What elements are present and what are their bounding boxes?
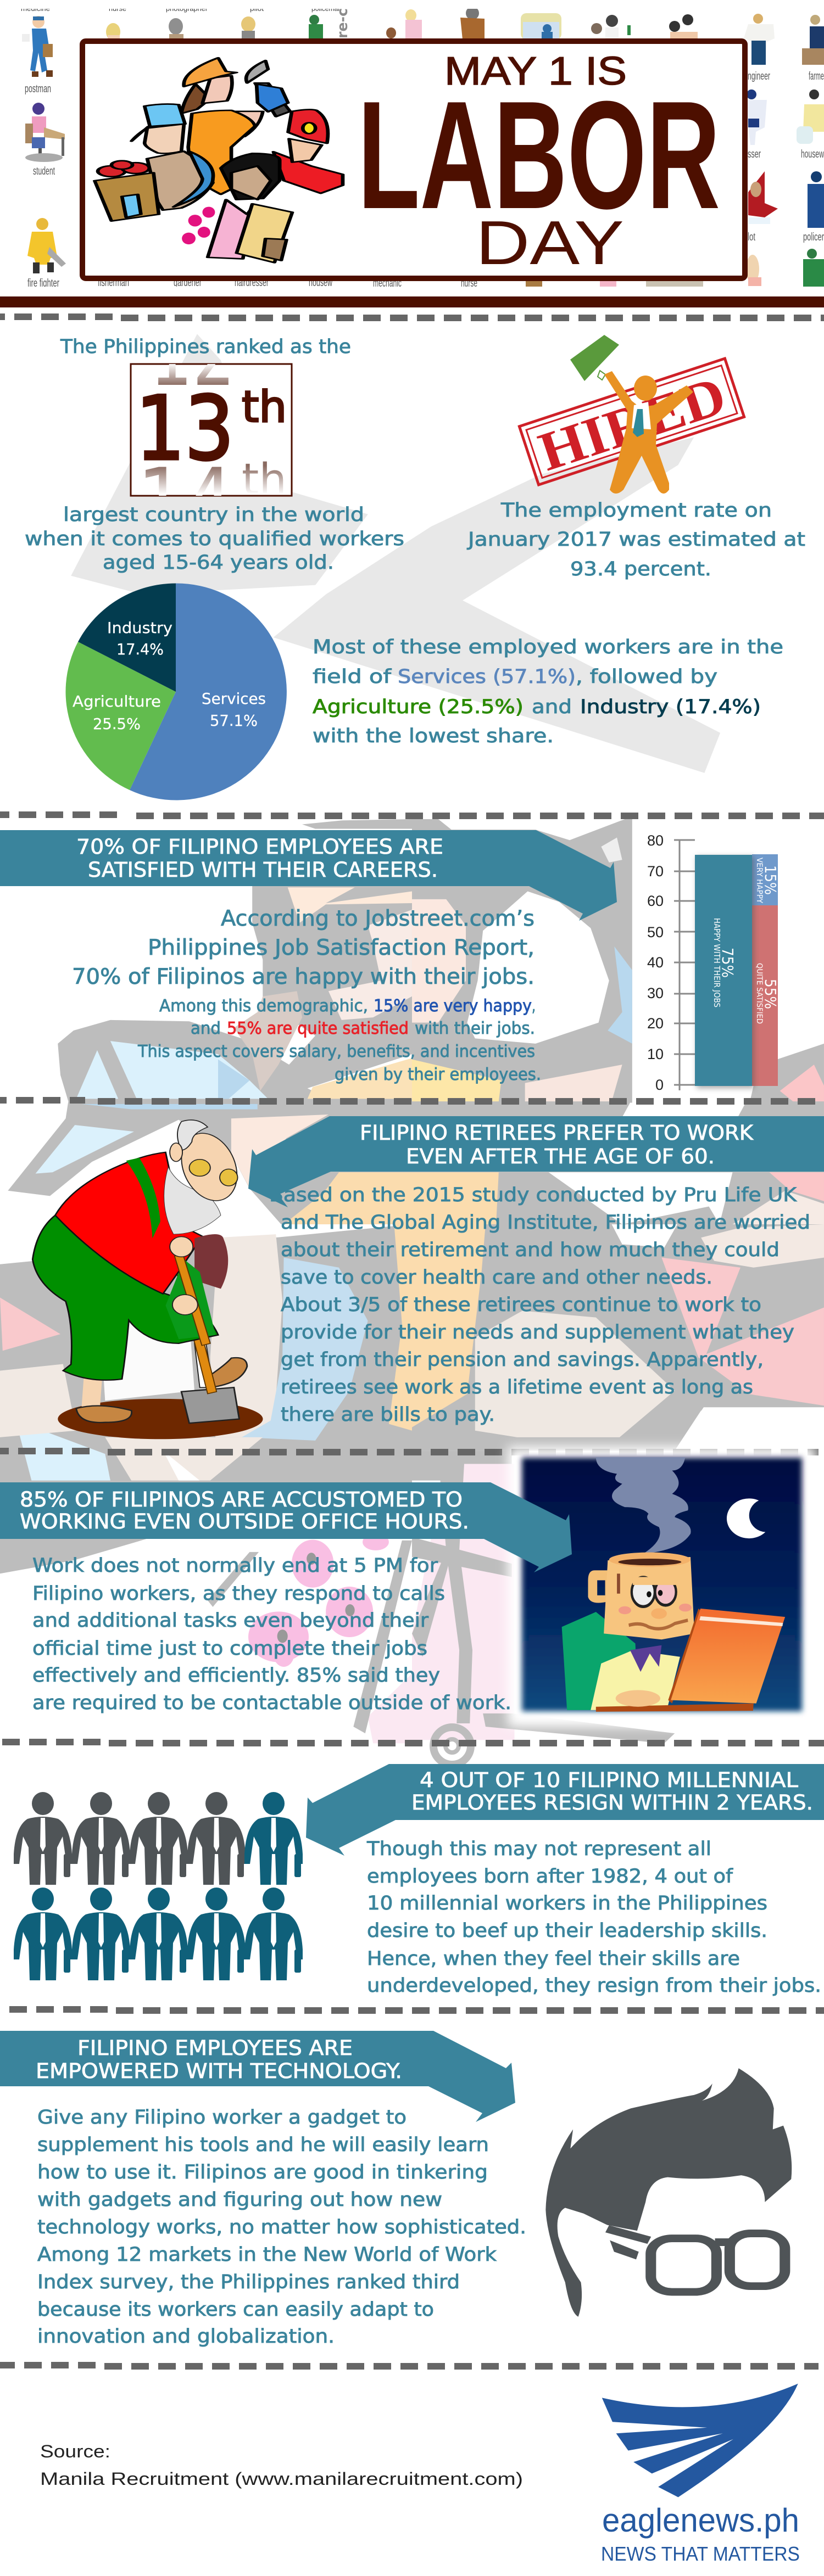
upper left watermark	[8, 819, 412, 1224]
glasses	[190, 1160, 238, 1186]
text: job satisfaction report: and	[191, 1019, 221, 1038]
bar: happy with their jobs	[695, 855, 752, 1086]
text: outside office paragraph: effectively and efficiently. 85% said they	[32, 1665, 440, 1687]
text: sector summary: with the lowest share.	[313, 725, 554, 747]
side and bottom labels: nurse	[461, 277, 477, 289]
text: job satisfaction report: ,	[532, 996, 536, 1016]
text: sector summary: Most of these employed workers are in the	[313, 636, 783, 658]
section: technology	[0, 2031, 792, 2348]
hired stamp: HIRED	[532, 365, 733, 483]
clipboard woman	[208, 153, 292, 262]
slice: services	[130, 583, 287, 800]
side and bottom labels: fisherman	[98, 277, 129, 289]
text: sector summary: field of	[313, 666, 392, 688]
title text: May 1 is Labor Day: MAY 1 IS	[444, 49, 627, 93]
illustration: four workers	[94, 58, 343, 262]
text: job satisfaction report: This aspect covers salary, benefits, and incentives	[137, 1042, 535, 1061]
text: outside office paragraph: official time just to complete their jobs	[32, 1638, 427, 1660]
text: largest country: when it comes to qualified workers	[25, 528, 404, 550]
text: retirees paragraph: Based on the 2015 study conducted by Pru Life UK	[269, 1184, 797, 1206]
side and bottom labels: sser	[748, 148, 761, 160]
section: retirees	[32, 1116, 824, 1439]
side and bottom labels: housew	[309, 277, 332, 289]
banner arrow: technology: FILIPINO EMPLOYEES ARE	[77, 2036, 353, 2060]
section: outside office hours	[0, 1447, 816, 1727]
top row occupation labels: pilot	[250, 4, 264, 13]
rank counter box: 14	[137, 449, 233, 552]
bar value labels: 15%	[761, 865, 780, 895]
dashed divider	[0, 2365, 819, 2366]
text: outside office paragraph: are required to be contactable outside of work.	[32, 1692, 511, 1714]
top row occupation labels	[21, 9, 342, 12]
text: job satisfaction report: 55% are quite satisfied	[227, 1019, 409, 1038]
source note: Source:	[40, 2441, 110, 2461]
text: largest country: aged 15-64 years old.	[103, 552, 334, 574]
dashed divider	[0, 1100, 819, 1101]
rank counter box: 13	[136, 377, 234, 480]
figure: student	[25, 103, 65, 162]
top row occupation labels: policeman	[311, 4, 342, 13]
section: millennials	[14, 1764, 824, 1997]
text: job satisfaction report: 15% are very happy	[374, 996, 532, 1016]
icon: man with glasses	[545, 2068, 792, 2317]
text: retirees paragraph: save to cover health care and other needs.	[281, 1267, 712, 1289]
eyes	[632, 1577, 676, 1606]
top row figures	[106, 9, 698, 38]
hair	[177, 1120, 208, 1150]
legs and boots	[76, 1343, 247, 1423]
text: technology paragraph: with gadgets and figuring out how new	[37, 2189, 442, 2211]
text: largest country	[25, 504, 404, 574]
collar	[630, 1645, 661, 1672]
axis labels: 60	[647, 893, 664, 909]
text: millennials paragraph: desire to beef up their leadership skills.	[367, 1920, 767, 1942]
text: employment rate: January 2017 was estimated at	[467, 529, 805, 551]
text: job satisfaction report: given by their employees.	[335, 1065, 541, 1084]
background: giant workers watermark	[0, 819, 824, 1765]
text: millennials paragraph: Though this may not represent all	[366, 1838, 711, 1860]
section: hired figure and employment rate	[467, 335, 805, 580]
laptop	[668, 1609, 703, 1704]
text: retirees paragraph: About 3/5 of these retirees continue to work to	[281, 1294, 761, 1316]
title text: May 1 is Labor Day: DAY	[476, 208, 624, 277]
top row occupation labels: nurse	[109, 4, 126, 13]
face	[172, 1128, 246, 1206]
text: retirees paragraph: there are bills to pay.	[281, 1404, 495, 1426]
axis labels: 80	[647, 832, 664, 849]
ground	[58, 1399, 263, 1439]
text: technology paragraph: Among 12 markets in the New World of Work	[37, 2244, 497, 2266]
bar value labels: 75%	[719, 948, 737, 978]
dashed divider	[0, 815, 824, 816]
banner arrow: satisfied with careers	[0, 830, 617, 921]
header rule	[0, 296, 824, 307]
side and bottom labels: mechanic	[373, 277, 402, 289]
text: job satisfaction report: with their jobs.	[415, 1019, 535, 1038]
text: millennials paragraph: Hence, when they feel their skills are	[367, 1948, 740, 1970]
background: crossed tools watermark	[71, 334, 720, 773]
text: employment rate: 93.4 percent.	[570, 558, 711, 580]
axis labels: 20	[647, 1015, 664, 1032]
banner arrow: millennials	[306, 1764, 824, 1856]
top row occupation labels: photographer	[166, 4, 208, 13]
bar shadow	[697, 856, 754, 1088]
text: technology paragraph: Index survey, the Philippines ranked third	[37, 2271, 460, 2293]
upper right watermark	[412, 819, 824, 1224]
axis labels: 40	[647, 954, 664, 971]
text: technology paragraph: technology works, no matter how sophisticated.	[37, 2216, 526, 2238]
glow	[508, 1447, 816, 1727]
bar value labels: 55%	[761, 979, 780, 1009]
slice: industry	[78, 583, 176, 692]
text: ranked as the: The Philippines ranked as the	[60, 336, 351, 358]
bar value labels: QUITE SATISFIED	[755, 963, 764, 1024]
header job clip-art strip	[21, 4, 824, 289]
suspender	[126, 1158, 160, 1239]
pie labels	[73, 619, 266, 733]
banner arrow: millennials: 4 OUT OF 10 FILIPINO MILLENNIAL	[420, 1768, 798, 1792]
lower right watermark	[412, 1224, 824, 1743]
text: retirees paragraph	[269, 1184, 810, 1426]
hair	[545, 2068, 792, 2317]
side and bottom labels: ngineer	[748, 70, 770, 82]
bar value labels: HAPPY WITH THEIR JOBS	[712, 918, 722, 1007]
text: retirees paragraph: get from their pension and savings. Apparently,	[281, 1349, 764, 1371]
chart axis	[674, 840, 695, 1090]
side and bottom labels: fire fighter	[27, 277, 59, 289]
text: retirees paragraph: about their retirement and how much they could	[281, 1239, 780, 1261]
banner arrow: satisfied with careers: 70% OF FILIPINO EMPLOYEES ARE	[76, 835, 443, 859]
shirt	[591, 1650, 680, 1710]
text: sector summary: Services (57.1%)	[398, 666, 576, 688]
rank counter box: th	[242, 383, 287, 432]
section: career satisfaction	[0, 819, 824, 1103]
axis labels: 30	[647, 985, 664, 1001]
beard	[164, 1167, 221, 1234]
pie labels: 57.1%	[210, 712, 258, 730]
banner arrow: retirees: EVEN AFTER THE AGE OF 60.	[406, 1145, 715, 1168]
logo: eaglenews.ph	[601, 2384, 800, 2565]
pie labels: Agriculture	[73, 692, 161, 710]
text: retirees paragraph: and The Global Aging Institute, Filipinos are worried	[281, 1212, 810, 1234]
pie labels: Industry	[107, 619, 172, 637]
stethoscope ring	[433, 1727, 471, 1765]
dashed divider	[0, 1451, 819, 1452]
text: employment rate	[467, 500, 805, 580]
flowers	[182, 207, 215, 244]
source note	[40, 2441, 523, 2489]
rank counter box	[130, 363, 292, 496]
axis labels: 70	[647, 863, 664, 880]
text: millennials paragraph	[366, 1838, 821, 1997]
text: sector summary: , followed by	[576, 666, 717, 688]
ear	[170, 1143, 182, 1162]
icon: celebrating worker	[570, 335, 693, 494]
right column figures	[526, 14, 824, 287]
sleeve	[165, 1259, 215, 1339]
text: sector summary: Industry (17.4%)	[580, 696, 761, 718]
lower left watermark	[0, 1224, 412, 1746]
dashed divider	[0, 317, 824, 318]
text: millennials paragraph: underdeveloped, they resign from their jobs.	[367, 1975, 821, 1997]
logo tagline: NEWS THAT MATTERS	[601, 2543, 800, 2565]
fire fighter	[274, 109, 343, 193]
text: outside office paragraph: Filipino workers, as they respond to calls	[32, 1583, 445, 1605]
icon: eagle wing	[602, 2384, 798, 2497]
banner arrow: retirees	[248, 1116, 824, 1207]
text: retirees paragraph: retirees see work as a lifetime event as long as	[281, 1376, 753, 1398]
text: technology paragraph	[37, 2107, 526, 2348]
axis labels	[647, 832, 664, 1093]
text: technology paragraph: Give any Filipino worker a gadget to	[37, 2107, 407, 2129]
text: outside office paragraph	[32, 1555, 511, 1714]
text: millennials paragraph: employees born after 1982, 4 out of	[367, 1866, 733, 1888]
title text: May 1 is Labor Day	[358, 49, 720, 277]
banner arrow: retirees: FILIPINO RETIREES PREFER TO WORK	[360, 1121, 754, 1145]
sack	[194, 1234, 228, 1289]
banner arrow: technology: EMPOWERED WITH TECHNOLOGY.	[36, 2059, 402, 2083]
pictogram: 4 of 10 millennials	[14, 1792, 303, 1980]
pie labels: 17.4%	[116, 640, 164, 658]
text: sector summary	[313, 636, 783, 747]
source note: Manila Recruitment (www.manilarecruitment.com)	[40, 2469, 523, 2489]
glasses	[607, 2229, 785, 2292]
side and bottom labels	[25, 70, 824, 289]
shovel	[172, 1255, 239, 1423]
section: 13th rank	[25, 303, 404, 574]
steam	[596, 1457, 691, 1554]
trousers	[32, 1216, 218, 1380]
mug handle	[588, 1570, 608, 1603]
axis labels: 50	[647, 924, 664, 940]
axis labels: 10	[647, 1046, 664, 1062]
banner arrow: outside office hours	[0, 1482, 572, 1572]
text: outside office paragraph: Work does not normally end at 5 PM for	[32, 1555, 438, 1577]
banner arrow: outside office hours: WORKING EVEN OUTSIDE OFFICE HOURS.	[20, 1510, 469, 1533]
banner arrow: millennials: EMPLOYEES RESIGN WITHIN 2 YEARS.	[411, 1791, 813, 1815]
text: technology paragraph: how to use it. Filipinos are good in tinkering	[37, 2161, 488, 2183]
axis labels: 0	[655, 1077, 664, 1093]
figure: fire fighter	[27, 218, 66, 273]
text: technology paragraph: because its workers can easily adapt to	[37, 2299, 434, 2321]
mug	[604, 1557, 694, 1639]
banner arrow: technology	[0, 2031, 515, 2122]
bar chart: job satisfaction	[632, 819, 824, 1103]
chair	[562, 1612, 638, 1710]
bar: quite satisfied	[752, 905, 778, 1086]
text: job satisfaction report: 70% of Filipinos are happy with their jobs.	[72, 965, 535, 989]
side and bottom labels: gardener	[174, 277, 202, 289]
night sky	[522, 1458, 802, 1711]
fruit seller	[94, 104, 213, 221]
rank counter box: th	[242, 455, 287, 505]
text: job satisfaction report: Among this demographic,	[159, 996, 368, 1016]
text: millennials paragraph: 10 millennial workers in the Philippines	[367, 1892, 767, 1914]
text: sector summary: and	[532, 696, 572, 718]
slice: agriculture	[65, 642, 176, 790]
logo wordmark: eaglenews.ph	[602, 2502, 799, 2539]
pie labels: Services	[202, 690, 266, 708]
side and bottom labels: student	[33, 165, 55, 177]
bar value labels	[712, 858, 780, 1024]
text: sector summary: Agriculture (25.5%)	[313, 696, 524, 718]
moon	[727, 1498, 765, 1538]
side and bottom labels: hairdresser	[235, 277, 269, 289]
dashed divider	[9, 2009, 824, 2011]
text: technology paragraph: supplement his tools and he will easily learn	[37, 2134, 489, 2156]
illustration: old man digging	[32, 1120, 263, 1439]
hands	[170, 1237, 198, 1315]
hard hat worker	[181, 58, 290, 194]
text: outside office paragraph: and additional tasks even beyond their	[32, 1610, 429, 1632]
rank counter box: 12	[150, 303, 235, 406]
banner arrow: outside office hours: 85% OF FILIPINOS ARE ACCUSTOMED TO	[20, 1488, 463, 1511]
pie chart: employment by sector	[65, 583, 287, 800]
dashed divider	[2, 1742, 824, 1743]
shovel handle front	[175, 1255, 210, 1346]
text: technology paragraph: innovation and globalization.	[37, 2326, 335, 2348]
text: job satisfaction report: According to Jobstreet.com’s	[221, 906, 535, 931]
pie labels: 25.5%	[93, 715, 141, 733]
side and bottom labels: postman	[25, 83, 51, 95]
text: job satisfaction report: Philippines Job Satisfaction Report,	[148, 936, 535, 960]
title frame	[82, 41, 745, 278]
illustration: tired coffee mug at laptop	[508, 1447, 816, 1727]
top row occupation labels: medicine	[21, 4, 50, 13]
bar value labels: VERY HAPPY	[755, 858, 764, 903]
text: largest country: largest country in the world	[63, 504, 364, 526]
side and bottom labels: lot	[748, 231, 755, 243]
shirt	[55, 1152, 202, 1294]
figure: postman	[22, 16, 53, 77]
text: job satisfaction report	[72, 906, 541, 1084]
text: retirees paragraph: provide for their needs and supplement what they	[281, 1321, 794, 1343]
text: employment rate: The employment rate on	[500, 500, 772, 522]
banner arrow: satisfied with careers: SATISFIED WITH THEIR CAREERS.	[88, 858, 438, 882]
bar: very happy	[752, 854, 778, 905]
watermark fragment: re-c	[335, 8, 351, 38]
cheeks and mouth	[617, 1573, 692, 1629]
